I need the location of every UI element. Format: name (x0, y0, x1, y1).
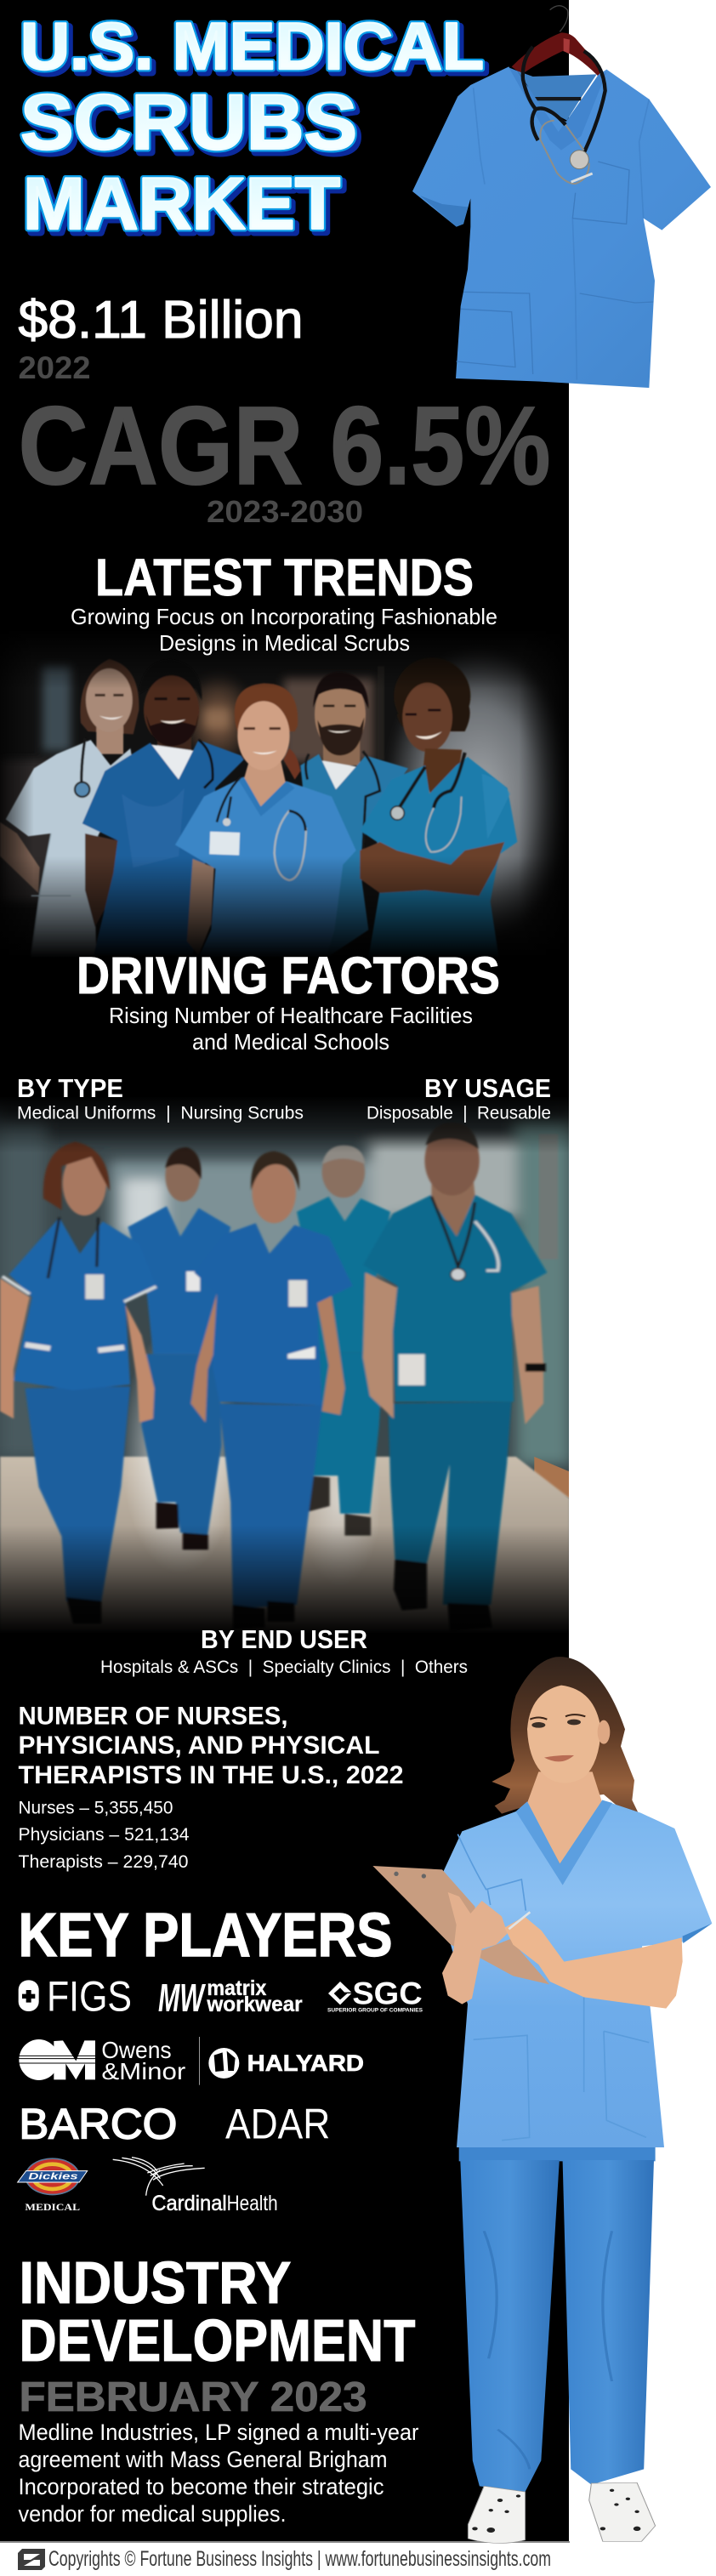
logo: FIGS (19, 1973, 132, 2021)
seams (457, 1834, 649, 2141)
logo: Cardinal Health: Health (227, 2192, 278, 2215)
text: workforce counts: Physicians – 521,134 (19, 1824, 190, 1845)
text: industry development description (19, 2420, 418, 2527)
logo: Halyard (208, 2048, 364, 2078)
title: U.S. MEDICAL (20, 9, 484, 83)
back man in teal (297, 1146, 390, 1536)
heading: key players: KEY PLAYERS (19, 1902, 393, 1970)
title: MARKET (26, 167, 344, 248)
heading: number of nurses, physicians and therapists: THERAPISTS IN THE U.S., 2022 (19, 1761, 403, 1789)
photo: team of five healthcare workers (0, 650, 562, 954)
man in dark blue scrubs (82, 659, 244, 955)
logo: Owens & Minor: &Minor (101, 2058, 185, 2084)
hanger bar (534, 97, 581, 100)
footer (0, 2541, 570, 2571)
title: SCRUBS (20, 79, 357, 166)
logo: Matrix Workwear: workwear (206, 1993, 303, 2016)
shirt body (412, 66, 711, 388)
corridor background (0, 1096, 570, 1464)
logo: Cardinal Health (113, 2158, 278, 2215)
viewer-right arm and hand (504, 1916, 683, 2009)
left woman (0, 1141, 156, 1624)
text: latest trends description: Designs in Medical Scrubs (159, 630, 410, 656)
date: february 2023: FEBRUARY 2023 (19, 2374, 367, 2420)
logos: key players (18, 1973, 423, 2215)
title: U.S. MEDICAL (20, 9, 484, 83)
market value year: 2022 (19, 350, 90, 385)
photo fades (9, 629, 547, 685)
CAGR period: 2023-2030 (207, 494, 363, 529)
logo: Matrix Workwear: MW (158, 1976, 206, 2020)
segment: by usage: Disposable | Reusable (367, 1104, 551, 1123)
segment: by end user: BY END USER (201, 1624, 367, 1654)
man in teal scrubs at back (300, 672, 408, 958)
panel: black background (0, 0, 569, 2541)
viewer-left arm and hand (442, 1892, 508, 2005)
logo: Halyard: HALYARD (247, 2050, 364, 2076)
photo: staff walking down hospital corridor (0, 1096, 570, 1656)
title: MARKET (23, 163, 340, 245)
logo: Matrix Workwear (158, 1976, 303, 2020)
pen (509, 1912, 530, 1929)
market value: $8.11 Billion (19, 291, 304, 350)
title (20, 9, 487, 248)
scrub top (444, 1800, 712, 2147)
logo: Dickies Medical: MEDICAL (25, 2202, 80, 2213)
left sleeve shading (420, 196, 468, 227)
title: MARKET (23, 163, 340, 245)
logo: FIGS: FIGS (47, 1973, 132, 2021)
heading: industry development: INDUSTRY (19, 2249, 291, 2316)
text: driving factors description: Rising Number of Healthcare Facilities (109, 1003, 473, 1028)
photo: smiling nurse holding clipboard (372, 1657, 712, 2543)
segment: by end user (100, 1624, 468, 1677)
text: driving factors description (109, 1003, 473, 1055)
heading: number of nurses, physicians and therapists (19, 1703, 403, 1789)
title: U.S. MEDICAL (24, 12, 487, 87)
woman with afro at right (360, 657, 517, 958)
logo: Cardinal Health: Cardinal (151, 2192, 227, 2215)
inside neck (517, 71, 597, 121)
back woman in blue (128, 1147, 230, 1550)
logo: SGC: SUPERIOR GROUP OF COMPANIES (327, 2007, 423, 2013)
text: industry development description: vendor for medical supplies. (19, 2501, 286, 2527)
front woman with badge (175, 683, 356, 958)
corridor fades (0, 1096, 570, 1153)
stethoscope (523, 47, 605, 151)
text: workforce counts (19, 1798, 190, 1872)
text: latest trends description: Growing Focus on Incorporating Fashionable (71, 604, 497, 629)
segment: by usage: BY USAGE (424, 1073, 551, 1103)
nurse upper body (372, 1657, 712, 2147)
text: workforce counts: Therapists – 229,740 (19, 1851, 189, 1872)
segment: by type (17, 1073, 304, 1123)
shoes (468, 2486, 526, 2543)
heading: industry development: DEVELOPMENT (19, 2307, 415, 2374)
photo: scrub shirt on hanger with stethoscope (412, 6, 711, 388)
heading: industry development (19, 2249, 415, 2374)
ear (598, 1720, 610, 1744)
logo: Matrix Workwear: matrix (207, 1976, 266, 2000)
hair (492, 1657, 640, 1817)
text: workforce counts: Nurses – 5,355,450 (19, 1798, 173, 1818)
folds (474, 88, 649, 380)
nurse trousers and shoes (459, 2143, 656, 2543)
text: industry development description: Medline Industries, LP signed a multi-year (19, 2420, 418, 2445)
right man in teal (363, 1123, 547, 1631)
logo: SGC: SGC (352, 1976, 423, 2011)
text: industry development description: Incorporated to become their strategic (19, 2474, 384, 2499)
logo: Adar: ADAR (225, 2100, 330, 2147)
logo: Dickies Medical: Dickies (28, 2172, 78, 2182)
hanger hook (550, 6, 568, 31)
icon: Fortune Business Insights logo (18, 2549, 45, 2570)
title: SCRUBS (20, 79, 357, 166)
woman in white coat (0, 659, 139, 958)
hallway background (3, 657, 560, 924)
segment: by type: BY TYPE (17, 1073, 123, 1103)
face (527, 1686, 601, 1783)
CAGR figure: CAGR 6.5% (19, 383, 551, 508)
logo: Owens & Minor (19, 2037, 185, 2084)
text: driving factors description: and Medical Schools (192, 1029, 389, 1055)
logo: Owens & Minor: Owens (101, 2037, 172, 2063)
heading: number of nurses, physicians and therapists: NUMBER OF NURSES, (19, 1703, 287, 1730)
divider (198, 2037, 201, 2085)
sleeve cuff (683, 1924, 712, 1943)
logo: SGC (327, 1976, 423, 2013)
segment: by type: Medical Uniforms | Nursing Scrubs (17, 1104, 304, 1123)
collar (516, 1800, 612, 1885)
logo: Dickies Medical (18, 2158, 88, 2213)
text: industry development description: agreement with Mass General Brigham (19, 2447, 388, 2472)
heading: latest trends: LATEST TRENDS (95, 549, 474, 606)
clipboard (372, 1866, 549, 1984)
text: latest trends description (71, 604, 497, 656)
segment: by end user: Hospitals & ASCs | Specialty Clinics | Others (100, 1658, 468, 1677)
title: SCRUBS (24, 82, 361, 169)
hanger (512, 32, 602, 76)
center woman (190, 1151, 353, 1629)
heading: number of nurses, physicians and therapists: PHYSICIANS, AND PHYSICAL (19, 1732, 379, 1760)
collar (509, 67, 606, 151)
pocket seams (457, 162, 653, 374)
segment: by usage (367, 1073, 551, 1123)
heading: driving factors: DRIVING FACTORS (77, 947, 500, 1004)
neck (527, 1771, 602, 1864)
logo: Barco: BARCO (19, 2100, 177, 2147)
